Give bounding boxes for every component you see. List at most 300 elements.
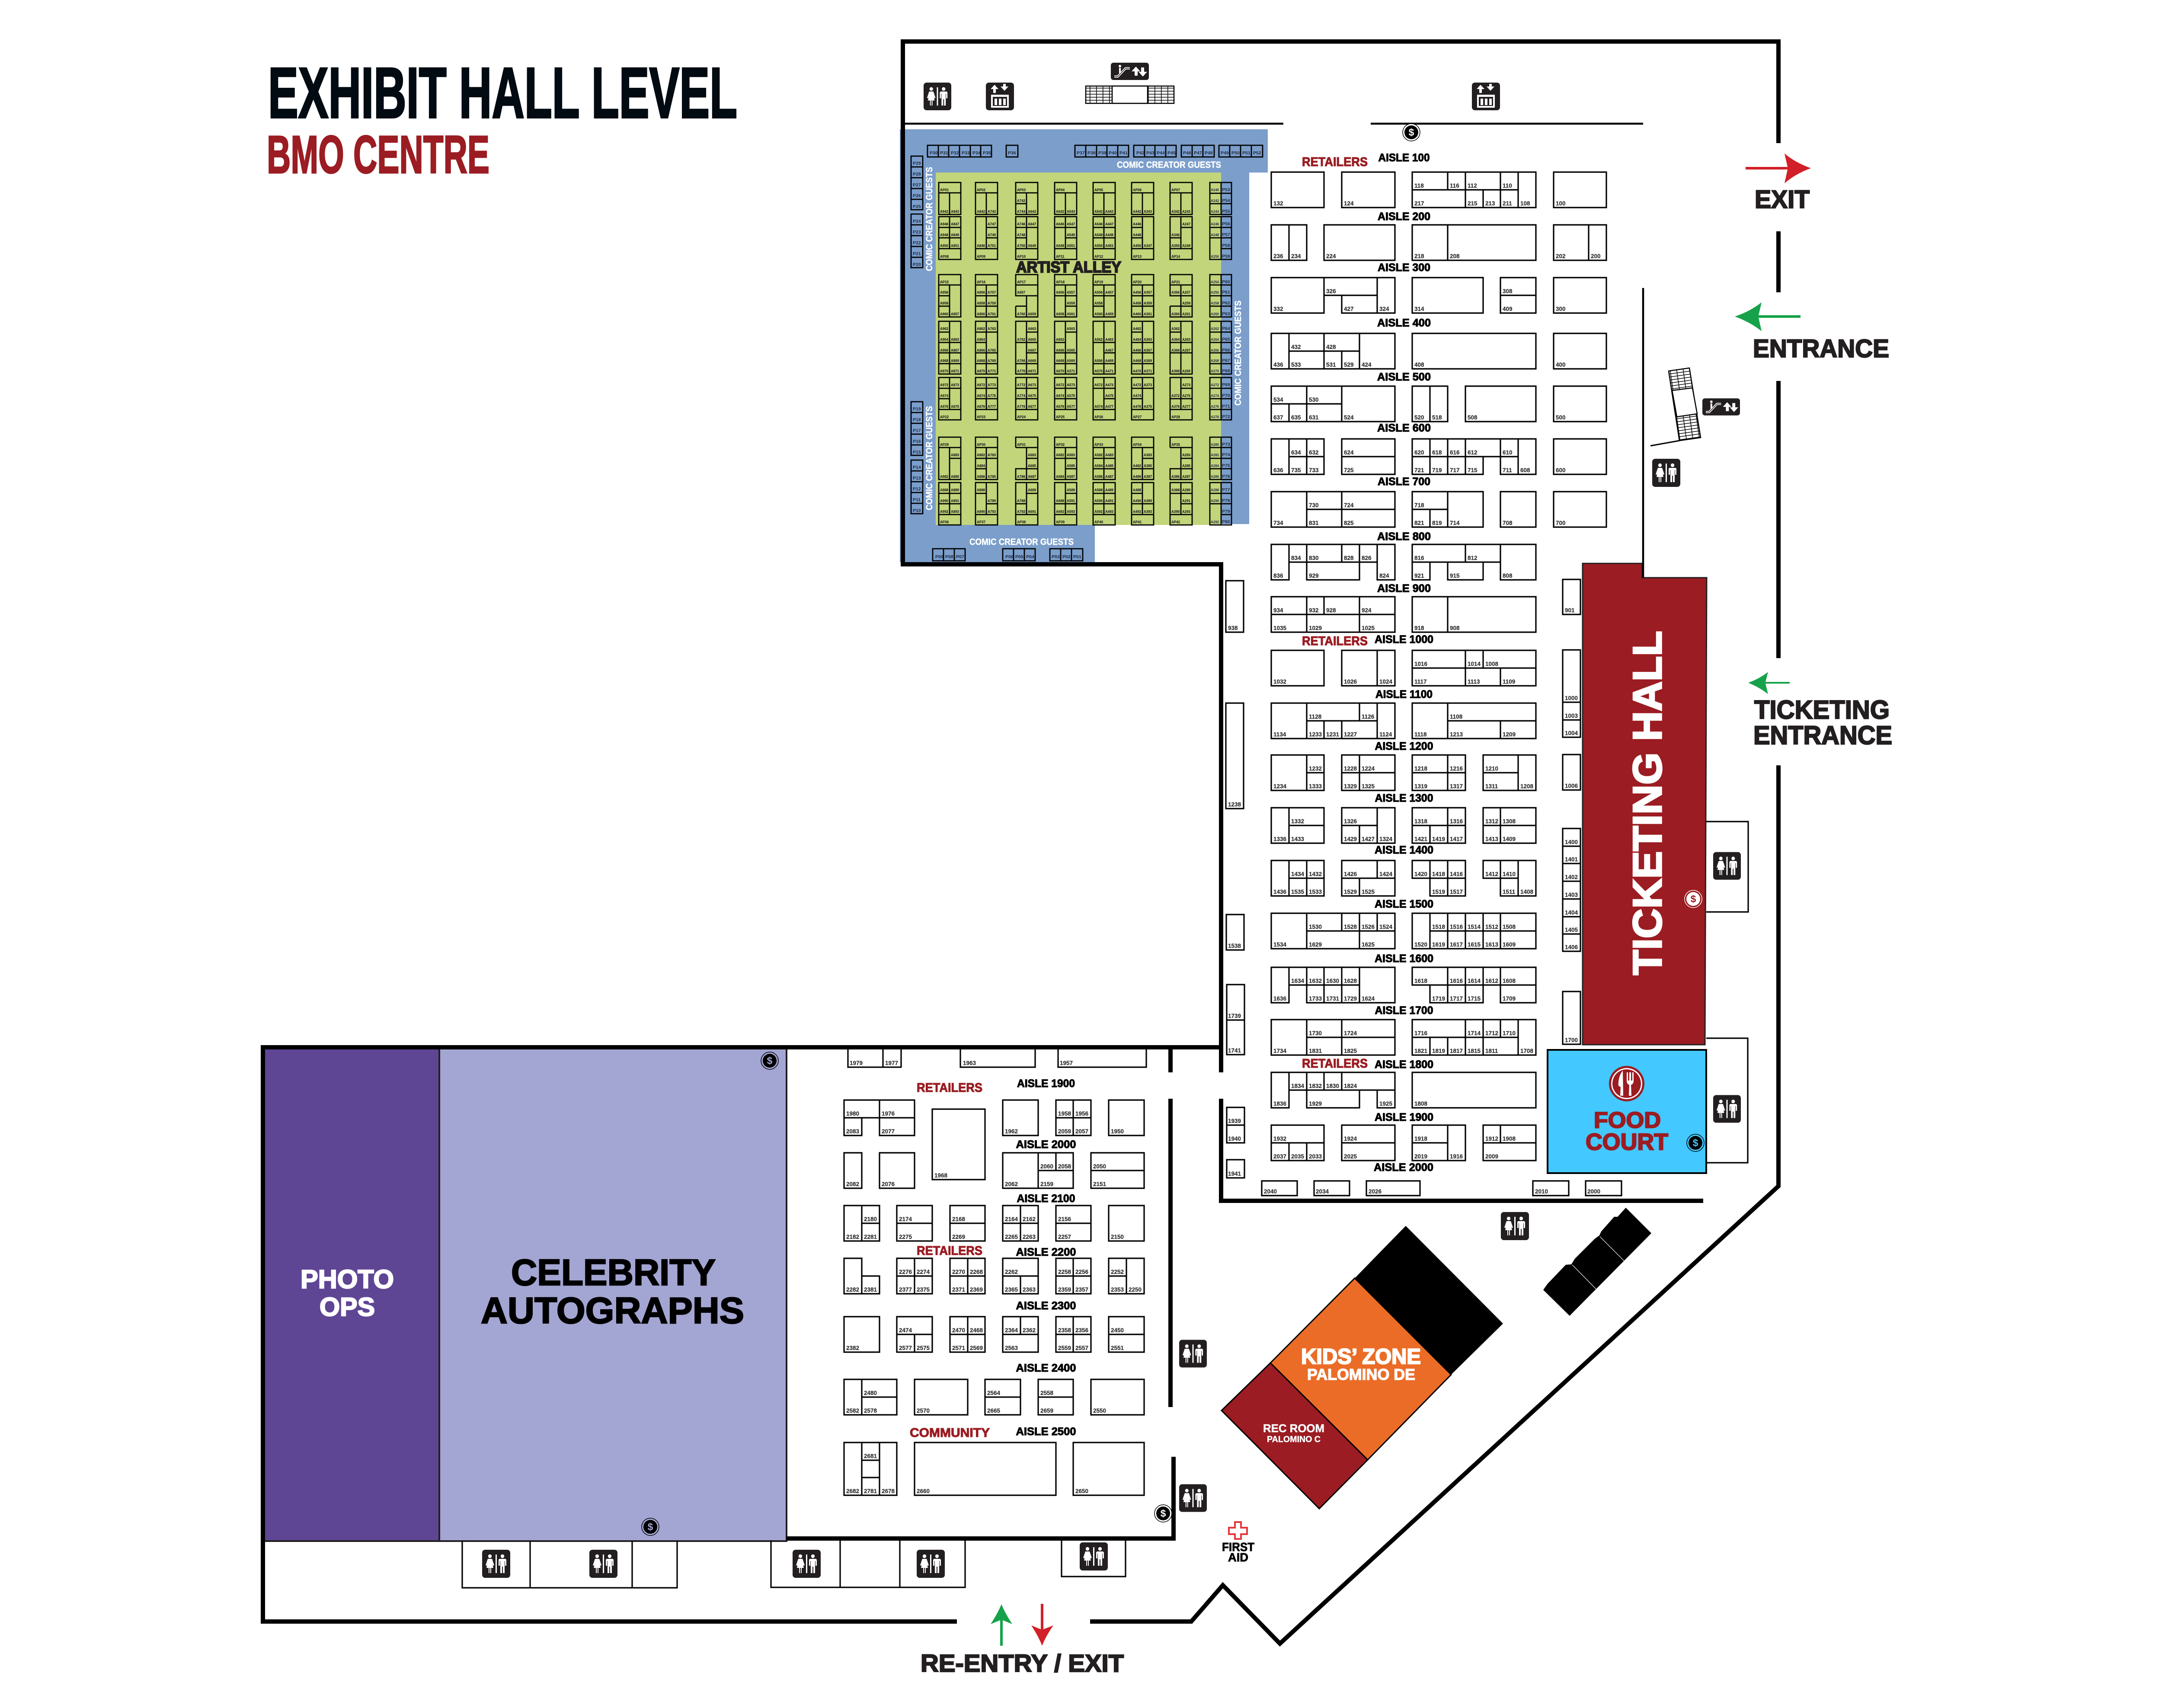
- artist alley table row E: A474: [1133, 394, 1142, 398]
- artist alley table row C: A361: [1144, 312, 1152, 316]
- artist alley table row D: [939, 321, 1192, 374]
- icon: elevator, left: [986, 83, 1014, 110]
- booth row: aisle 100: 112: [1468, 182, 1477, 189]
- booth row: aisle 1400: 1529: [1344, 889, 1357, 895]
- artist alley table row A: AP01: [940, 188, 949, 192]
- artist alley table row B: A551: [1067, 244, 1075, 248]
- icon: atm, lower hall: [1155, 1505, 1172, 1522]
- artist alley right-hand tables and comic guest tables: P69: [1222, 382, 1230, 387]
- booth row: aisle 800: 915: [1450, 573, 1460, 579]
- artist alley table row E: A874: [977, 394, 985, 398]
- artist alley table row G: A691: [1028, 510, 1036, 514]
- icon: restroom, bottom 2: [589, 1550, 617, 1578]
- artist alley table row F: A485: [1105, 464, 1114, 468]
- artist alley table row G: A688: [1056, 499, 1065, 503]
- artist alley right-hand tables and comic guest tables: A286: [1211, 475, 1219, 479]
- artist alley table row C: A357: [1144, 291, 1152, 294]
- lower hall booth row 7: 2678: [882, 1488, 895, 1494]
- artist alley table row G: A893: [951, 510, 959, 514]
- side booths: ticketing hall wall: 1401: [1565, 856, 1578, 863]
- comic guest tables: left column: P23: [913, 230, 921, 235]
- artist alley table row D: A463: [1105, 338, 1114, 342]
- lower hall booth row 4: 2369: [970, 1286, 983, 1293]
- panel: artist alley background: [936, 173, 1221, 525]
- booth row: aisle 1300: 1419: [1432, 836, 1445, 842]
- artist alley table row D: A369: [1144, 359, 1152, 363]
- artist alley right-hand tables and comic guest tables: A248: [1211, 233, 1219, 237]
- artist alley table row C: A360: [1171, 312, 1180, 316]
- comic guest tables: left column: P27: [913, 182, 921, 188]
- artist alley right-hand tables and comic guest tables: P59: [1222, 254, 1230, 259]
- side booths: ticketing hall wall: 1400: [1565, 839, 1578, 845]
- booth row: aisle 1100: 1108: [1450, 713, 1463, 720]
- artist alley table row C: A261: [1182, 312, 1191, 316]
- booth row: aisle 700: 714: [1450, 520, 1460, 526]
- aisle labels: lower hall: [1016, 1078, 1076, 1438]
- side booths: ticketing hall wall: 1402: [1565, 874, 1578, 880]
- aisle labels: main hall: AISLE 1800: [1375, 1059, 1433, 1071]
- booth row: aisle 1800: 1836: [1273, 1100, 1287, 1107]
- booth row: aisle 800: 826: [1362, 555, 1372, 561]
- comic guest tables: left column: P18: [913, 417, 921, 422]
- aisle labels: main hall: AISLE 800: [1377, 531, 1431, 543]
- artist alley right-hand tables and comic guest tables: A264: [1211, 338, 1219, 342]
- booth row: aisle 700: 700: [1556, 520, 1566, 526]
- side booths: west wall of main hall: 1941: [1228, 1171, 1241, 1177]
- artist alley table row G: A789: [988, 499, 996, 503]
- artist alley table row G: A488: [1133, 488, 1142, 492]
- artist alley table row F: AP33: [1094, 443, 1103, 447]
- booth row: aisle 1800: 1808: [1414, 1100, 1428, 1107]
- aisle labels: lower hall: AISLE 2000: [1016, 1139, 1076, 1151]
- booth row: aisle 200: 200: [1591, 253, 1601, 259]
- artist alley table row B: A448: [1133, 233, 1142, 237]
- aisle labels: main hall: AISLE 1900: [1375, 1111, 1433, 1123]
- comic guest tables: left column: P17: [913, 428, 921, 433]
- artist alley table row E: [939, 377, 1192, 420]
- booth row: aisle 1600: 1612: [1485, 978, 1498, 984]
- booths: along south wall of main hall: 2034: [1316, 1188, 1329, 1195]
- section label: retailers, lower hall 2: RETAILERS: [917, 1244, 982, 1258]
- artist alley table row B: AP14: [1171, 255, 1180, 259]
- artist alley table row F: AP32: [1056, 443, 1065, 447]
- panel: ticketing hall: [1583, 563, 1707, 1045]
- artist alley table row D: A667: [1028, 349, 1036, 352]
- lower hall booth row 4: 2371: [952, 1286, 966, 1293]
- artist alley table row B: A247: [1182, 222, 1191, 226]
- icon: atm, celebrity bottom: $: [648, 1521, 653, 1532]
- artist alley table row B: A550: [1094, 244, 1103, 248]
- artist alley right-hand tables and comic guest tables: P65: [1222, 337, 1230, 342]
- booth row: aisle 500: 518: [1432, 414, 1442, 421]
- lower hall booth row 4: 2250: [1129, 1286, 1142, 1293]
- artist alley right-hand tables and comic guest tables: P54: [1222, 198, 1230, 203]
- comic guest tables: bottom row: P05: [1015, 554, 1023, 560]
- artist alley table row C: A460: [1133, 312, 1142, 316]
- artist alley table row B: A447: [1105, 222, 1114, 226]
- artist alley table row A: A642: [1056, 210, 1065, 214]
- artist alley table row A: AP07: [1171, 188, 1180, 192]
- artist alley table row G: A491: [1105, 499, 1114, 503]
- comic guest tables: left column: P22: [913, 240, 921, 246]
- lower hall booth row 3: 2275: [899, 1234, 912, 1240]
- arrow: re-entry: [991, 1604, 1012, 1646]
- artist alley table row E: A676: [1056, 405, 1065, 409]
- icon: restroom, bottom 5: [1080, 1542, 1108, 1570]
- lower hall booth row 1: 1950: [1111, 1128, 1124, 1135]
- booth row: aisle 700: 821: [1414, 520, 1424, 526]
- artist alley table row D: A563: [1067, 327, 1075, 331]
- artist alley table row F: A583: [1067, 453, 1075, 457]
- artist alley table row D: A968: [940, 359, 949, 363]
- artist alley table row F: A785: [988, 475, 996, 479]
- artist alley table row G: A988: [940, 488, 949, 492]
- booth row: aisle 900: 1035: [1273, 625, 1287, 631]
- lower hall booth row 4: 2377: [899, 1286, 912, 1293]
- booth row: aisle 900: 1029: [1309, 625, 1322, 631]
- booth row: aisle 1300: 1318: [1414, 818, 1428, 825]
- booth row: aisle 1500: 1528: [1344, 924, 1357, 930]
- comic guest tables: left column: P14: [913, 465, 921, 470]
- comic guest tables: bottom row: P08: [945, 554, 953, 560]
- artist alley table row E: A275: [1182, 394, 1191, 398]
- booth row: aisle 900: 928: [1326, 607, 1336, 614]
- side booths: ticketing hall wall: 1000: [1565, 695, 1578, 701]
- artist alley table row G: A388: [1171, 488, 1180, 492]
- booth row: aisle 1100: 1213: [1450, 731, 1463, 738]
- artist alley table row F: A482: [1133, 464, 1142, 468]
- booth row: aisle 1400: 1525: [1362, 889, 1375, 895]
- booth row: aisle 500: [1271, 386, 1606, 422]
- booth row: aisle 200: 224: [1326, 253, 1336, 259]
- artist alley right-hand tables and comic guest tables: P67: [1222, 358, 1230, 363]
- exterior and interior walls: [263, 42, 1778, 1644]
- booth row: aisle 500: 631: [1309, 414, 1319, 421]
- aisle labels: lower hall: AISLE 2200: [1016, 1246, 1076, 1258]
- lower hall booth row 1: 1968: [934, 1172, 948, 1179]
- booth row: aisle 1900: 2009: [1485, 1153, 1498, 1160]
- lower hall booth row 4: 2262: [1005, 1269, 1018, 1275]
- lower hall booth row 6: 2550: [1093, 1407, 1106, 1414]
- artist alley table row G: A589: [1067, 488, 1075, 492]
- artist alley right-hand tables and comic guest tables: A274: [1211, 394, 1219, 398]
- artist alley right-hand tables and comic guest tables: A276: [1211, 405, 1219, 409]
- booth row: aisle 800: 830: [1309, 555, 1319, 561]
- comic guest tables: bottom row: P04: [1026, 554, 1034, 560]
- lower hall booth row 4: 2252: [1111, 1269, 1124, 1275]
- booth row: aisle 1000: 1008: [1485, 661, 1499, 667]
- lower hall booth row 1: 1976: [882, 1110, 895, 1117]
- artist alley table row D: A367: [1144, 349, 1152, 352]
- artist alley table row B: A449: [1105, 233, 1114, 237]
- booth row: aisle 1400: 1519: [1432, 889, 1445, 895]
- artist alley table row G: AP36: [940, 520, 949, 524]
- artist alley table row B: AP12: [1094, 255, 1103, 259]
- artist alley table row F: A687: [1028, 475, 1036, 479]
- artist alley right-hand tables and comic guest tables: P74: [1222, 452, 1230, 457]
- booth row: aisle 1200: [1271, 755, 1536, 790]
- booths: along north wall of lower hall: 1977: [885, 1060, 898, 1066]
- comic guest tables: left column: P20: [913, 262, 921, 267]
- side booths: ticketing hall wall: [1563, 579, 1580, 1044]
- artist alley table row B: A350: [1171, 244, 1180, 248]
- artist alley right-hand tables and comic guest tables: P62: [1222, 301, 1230, 306]
- comic guest tables: top row: P31: [940, 150, 948, 156]
- lower hall booth row 4: 2282: [846, 1286, 859, 1293]
- lower hall booth row 5: 2358: [1058, 1327, 1071, 1334]
- booth row: aisle 1200: 1234: [1273, 783, 1287, 790]
- comic guest tables: left column: P21: [913, 251, 921, 256]
- celebrity autographs label: [481, 1252, 744, 1331]
- artist alley table row G: A692: [1056, 510, 1065, 514]
- booth row: aisle 1600: 1733: [1309, 995, 1322, 1002]
- booth row: aisle 600: 620: [1414, 449, 1424, 456]
- lower hall booth row 4: 2381: [864, 1286, 877, 1293]
- booth row: aisle 1400: 1416: [1450, 871, 1463, 877]
- artist alley table row D: A864: [977, 338, 985, 342]
- side booths: west wall of main hall: 1538: [1228, 943, 1241, 949]
- lower hall booth row 1: 2057: [1075, 1128, 1088, 1135]
- section label: community: COMMUNITY: [910, 1426, 990, 1440]
- artist alley table row C: A761: [988, 312, 996, 316]
- photo ops label: [301, 1265, 394, 1321]
- artist alley right-hand tables and comic guest tables: P58: [1222, 243, 1230, 248]
- booth row: aisle 1000: 1109: [1503, 678, 1515, 685]
- comic guest tables: top row: P43: [1146, 150, 1155, 156]
- artist alley table row G: AP38: [1017, 520, 1026, 524]
- booth row: aisle 1400: 1426: [1344, 871, 1357, 877]
- comic guest tables: left column: P11: [913, 497, 921, 502]
- booth row: aisle 1200: 1208: [1520, 783, 1534, 790]
- comic guest tables: top row: P50: [1231, 150, 1240, 156]
- artist alley table row D: A671: [1028, 369, 1036, 373]
- artist alley table row B: A749: [988, 233, 996, 237]
- artist alley right-hand tables and comic guest tables: A284: [1211, 464, 1219, 468]
- booth row: aisle 1500: [1271, 913, 1536, 949]
- artist alley table row C: A561: [1067, 312, 1075, 316]
- artist alley table row D: A669: [1028, 359, 1036, 363]
- artist alley table row F: A883: [951, 453, 959, 457]
- lower hall booth row 2: 2159: [1040, 1181, 1053, 1187]
- artist alley heading: ARTIST ALLEY: [1016, 258, 1121, 276]
- aisle labels: main hall: AISLE 400: [1377, 317, 1431, 329]
- booth row: aisle 100: 132: [1273, 200, 1283, 207]
- label: comic creator guests, bottom: COMIC CREATOR GUESTS: [969, 537, 1074, 547]
- booth row: aisle 1200: 1232: [1309, 765, 1322, 772]
- artist alley table row B: AP10: [1017, 255, 1026, 259]
- artist alley table row F: A587: [1067, 475, 1075, 479]
- artist alley table row B: A548: [1094, 233, 1103, 237]
- artist alley right-hand tables and comic guest tables: P77: [1222, 487, 1230, 493]
- booth row: aisle 600: 632: [1309, 449, 1319, 456]
- aisle labels: main hall: AISLE 1300: [1375, 792, 1433, 804]
- booth row: aisle 1400: 1418: [1432, 871, 1446, 877]
- artist alley right-hand tables and comic guest tables: A260: [1211, 312, 1219, 316]
- aisle labels: main hall: AISLE 200: [1378, 211, 1430, 223]
- booth row: aisle 1600: 1630: [1326, 978, 1339, 984]
- icon: atm, lower hall: $: [1161, 1508, 1166, 1519]
- artist alley right-hand tables and comic guest tables: P55: [1222, 209, 1230, 214]
- lower hall booth row 2: [844, 1153, 1144, 1188]
- artist alley table row A: AP02: [977, 188, 986, 192]
- booth row: aisle 1300: 1413: [1485, 836, 1499, 842]
- lower hall booth row 5: 2468: [970, 1327, 983, 1334]
- artist alley table row E: A876: [977, 405, 985, 409]
- aisle labels: lower hall: AISLE 2400: [1016, 1362, 1076, 1374]
- booth row: aisle 1400: 1434: [1291, 871, 1305, 877]
- booth row: aisle 1500: 1619: [1432, 941, 1445, 948]
- comic guest tables: top row: P35: [983, 150, 991, 156]
- food court label: FOOD: [1594, 1108, 1661, 1133]
- artist alley table row D: A469: [1105, 359, 1114, 363]
- booth row: aisle 600: 624: [1344, 449, 1354, 456]
- booth row: aisle 700: 718: [1414, 502, 1424, 509]
- booth row: aisle 1200: 1325: [1362, 783, 1375, 790]
- booth row: aisle 400: 400: [1556, 361, 1566, 368]
- booth row: aisle 400: 436: [1273, 361, 1283, 368]
- comic guest tables: left column: [911, 156, 923, 514]
- booth row: aisle 100: 217: [1414, 200, 1424, 207]
- artist alley right-hand tables and comic guest tables: A250: [1211, 255, 1219, 259]
- booth row: aisle 1300: 1316: [1450, 818, 1463, 825]
- booth row: aisle 600: 711: [1503, 467, 1512, 473]
- lower hall booth row 5: 2364: [1005, 1327, 1018, 1334]
- artist alley table row A: AP06: [1133, 188, 1142, 192]
- artist alley table row D: A863: [951, 338, 959, 342]
- icon: elevator, right: [1472, 83, 1500, 110]
- entrance label: ENTRANCE: [1753, 335, 1889, 363]
- artist alley table row E: A873: [951, 383, 959, 387]
- icon: restroom, corridor lower: [1179, 1484, 1207, 1512]
- artist alley table row C: AP16: [977, 280, 986, 284]
- booth row: aisle 300: 332: [1273, 306, 1283, 312]
- booth row: aisle 200: [1271, 225, 1606, 260]
- artist alley table row C: A458: [1133, 301, 1142, 305]
- artist alley right-hand tables and comic guest tables: A254: [1211, 280, 1219, 284]
- lower hall booth row 4: 2353: [1111, 1286, 1124, 1293]
- icon: atm, top: [1403, 124, 1420, 141]
- icon: atm, ticketing hall: $: [1691, 893, 1696, 905]
- booth row: aisle 300: 314: [1414, 306, 1424, 312]
- artist alley right-hand tables and comic guest tables: A262: [1211, 327, 1219, 331]
- side booths: ticketing hall wall: 1406: [1565, 944, 1578, 950]
- artist alley table row G: A891: [951, 499, 959, 503]
- lower hall booth row 6: 2570: [917, 1407, 930, 1414]
- aisle labels: lower hall: AISLE 2500: [1016, 1426, 1076, 1438]
- booth row: aisle 900: [1271, 597, 1536, 632]
- icon: atm, food court: [1687, 1134, 1704, 1151]
- booth row: aisle 700: 730: [1309, 502, 1319, 509]
- lower hall booth row 3: 2164: [1005, 1216, 1018, 1222]
- artist alley table row F: A886: [977, 475, 985, 479]
- artist alley table row D: A362: [1171, 327, 1180, 331]
- lower hall booth row 5: 2551: [1111, 1345, 1124, 1351]
- booth row: aisle 400: [1271, 333, 1606, 369]
- lower hall booth row 3: 2180: [864, 1216, 877, 1222]
- booth row: aisle 1500: 1615: [1468, 941, 1481, 948]
- artist alley table row F: A982: [940, 475, 949, 479]
- booth row: aisle 100: 118: [1414, 182, 1424, 189]
- kids zone label: [1301, 1344, 1421, 1383]
- comic guest tables: left column: P19: [913, 406, 921, 412]
- lower hall booth row 3: 2281: [864, 1234, 877, 1240]
- artist alley table row F: AP35: [1171, 443, 1180, 447]
- artist alley table row C: A958: [940, 301, 949, 305]
- booth row: aisle 1700: 1831: [1309, 1048, 1322, 1054]
- artist alley table row A: A842: [977, 210, 985, 214]
- booth row: aisle 1500: 1617: [1450, 941, 1463, 948]
- comic guest tables: top row: P32: [951, 150, 959, 156]
- booth row: aisle 200: 236: [1273, 253, 1283, 259]
- icon: restroom, top left: [924, 83, 951, 110]
- artist alley table row A: AP04: [1056, 188, 1065, 192]
- lower hall booth row 7: 2682: [846, 1488, 859, 1494]
- artist alley table row B: A748: [1017, 233, 1026, 237]
- booth row: aisle 600: [1271, 439, 1606, 474]
- artist alley table row F: AP31: [1017, 443, 1026, 447]
- booth row: aisle 1700: 1708: [1520, 1048, 1534, 1054]
- booth row: aisle 1300: 1433: [1291, 836, 1305, 842]
- aisle labels: main hall: AISLE 1400: [1375, 844, 1433, 856]
- comic guest tables: top row: P42: [1136, 150, 1145, 156]
- booth row: aisle 1100: 1209: [1503, 731, 1516, 738]
- artist alley table row F: A483: [1105, 453, 1114, 457]
- artist alley table row A: A542: [1094, 210, 1103, 214]
- artist alley table row G: A590: [1094, 499, 1103, 503]
- artist alley table row G: A592: [1094, 510, 1103, 514]
- side booths: west wall of main hall: 938: [1228, 625, 1238, 631]
- artist alley table row F: AP30: [977, 443, 986, 447]
- comic guest tables: left column: P15: [913, 450, 921, 455]
- lower hall booth row 6: 2578: [864, 1407, 877, 1414]
- artist alley table row D: A366: [1171, 349, 1180, 352]
- label: comic creator guests, left lower: COMIC CREATOR GUESTS: [924, 406, 934, 510]
- artist alley table row B: A648: [1056, 244, 1065, 248]
- booth row: aisle 800: 921: [1414, 573, 1424, 579]
- celebrity autographs label: CELEBRITY: [511, 1252, 716, 1293]
- booth row: aisle 1500: 1625: [1362, 941, 1375, 948]
- lower hall booth row 4: 2274: [917, 1269, 930, 1275]
- artist alley table row E: A475: [1105, 394, 1114, 398]
- lower hall booth row 4: [844, 1258, 1144, 1294]
- artist alley table row D: A666: [1056, 349, 1065, 352]
- comic guest tables: top row: P41: [1119, 150, 1128, 156]
- lower hall booth row 3: 2269: [952, 1234, 965, 1240]
- icon: atm, ticketing hall: [1685, 890, 1702, 908]
- booth row: aisle 100: 124: [1344, 200, 1354, 207]
- artist alley table row G: A890: [977, 510, 985, 514]
- booth row: aisle 600: 733: [1309, 467, 1319, 473]
- booth row: aisle 1300: 1421: [1414, 836, 1428, 842]
- booth row: aisle 200: 208: [1450, 253, 1460, 259]
- artist alley table row D: A267: [1182, 349, 1191, 352]
- artist alley table row A: A742: [1017, 199, 1026, 203]
- artist alley table row F: A685: [1028, 464, 1036, 468]
- artist alley table row G: A389: [1144, 499, 1152, 503]
- artist alley right-hand tables and comic guest tables: A278: [1211, 415, 1219, 419]
- lower hall booth row 1: [844, 1100, 1144, 1180]
- lower hall booth row 3: 2265: [1005, 1234, 1018, 1240]
- artist alley table row B: AP08: [940, 255, 949, 259]
- booth row: aisle 500: 508: [1468, 414, 1478, 421]
- booth row: aisle 200: 202: [1556, 253, 1566, 259]
- artist alley right-hand tables and comic guest tables: A290: [1211, 499, 1219, 503]
- artist alley table row F: A786: [1017, 475, 1026, 479]
- escalator plan, top: [1086, 86, 1174, 103]
- artist alley table row D: A869: [951, 359, 959, 363]
- ticketing entrance label: ENTRANCE: [1753, 721, 1892, 750]
- comic guest tables: top row: P48: [1205, 150, 1213, 156]
